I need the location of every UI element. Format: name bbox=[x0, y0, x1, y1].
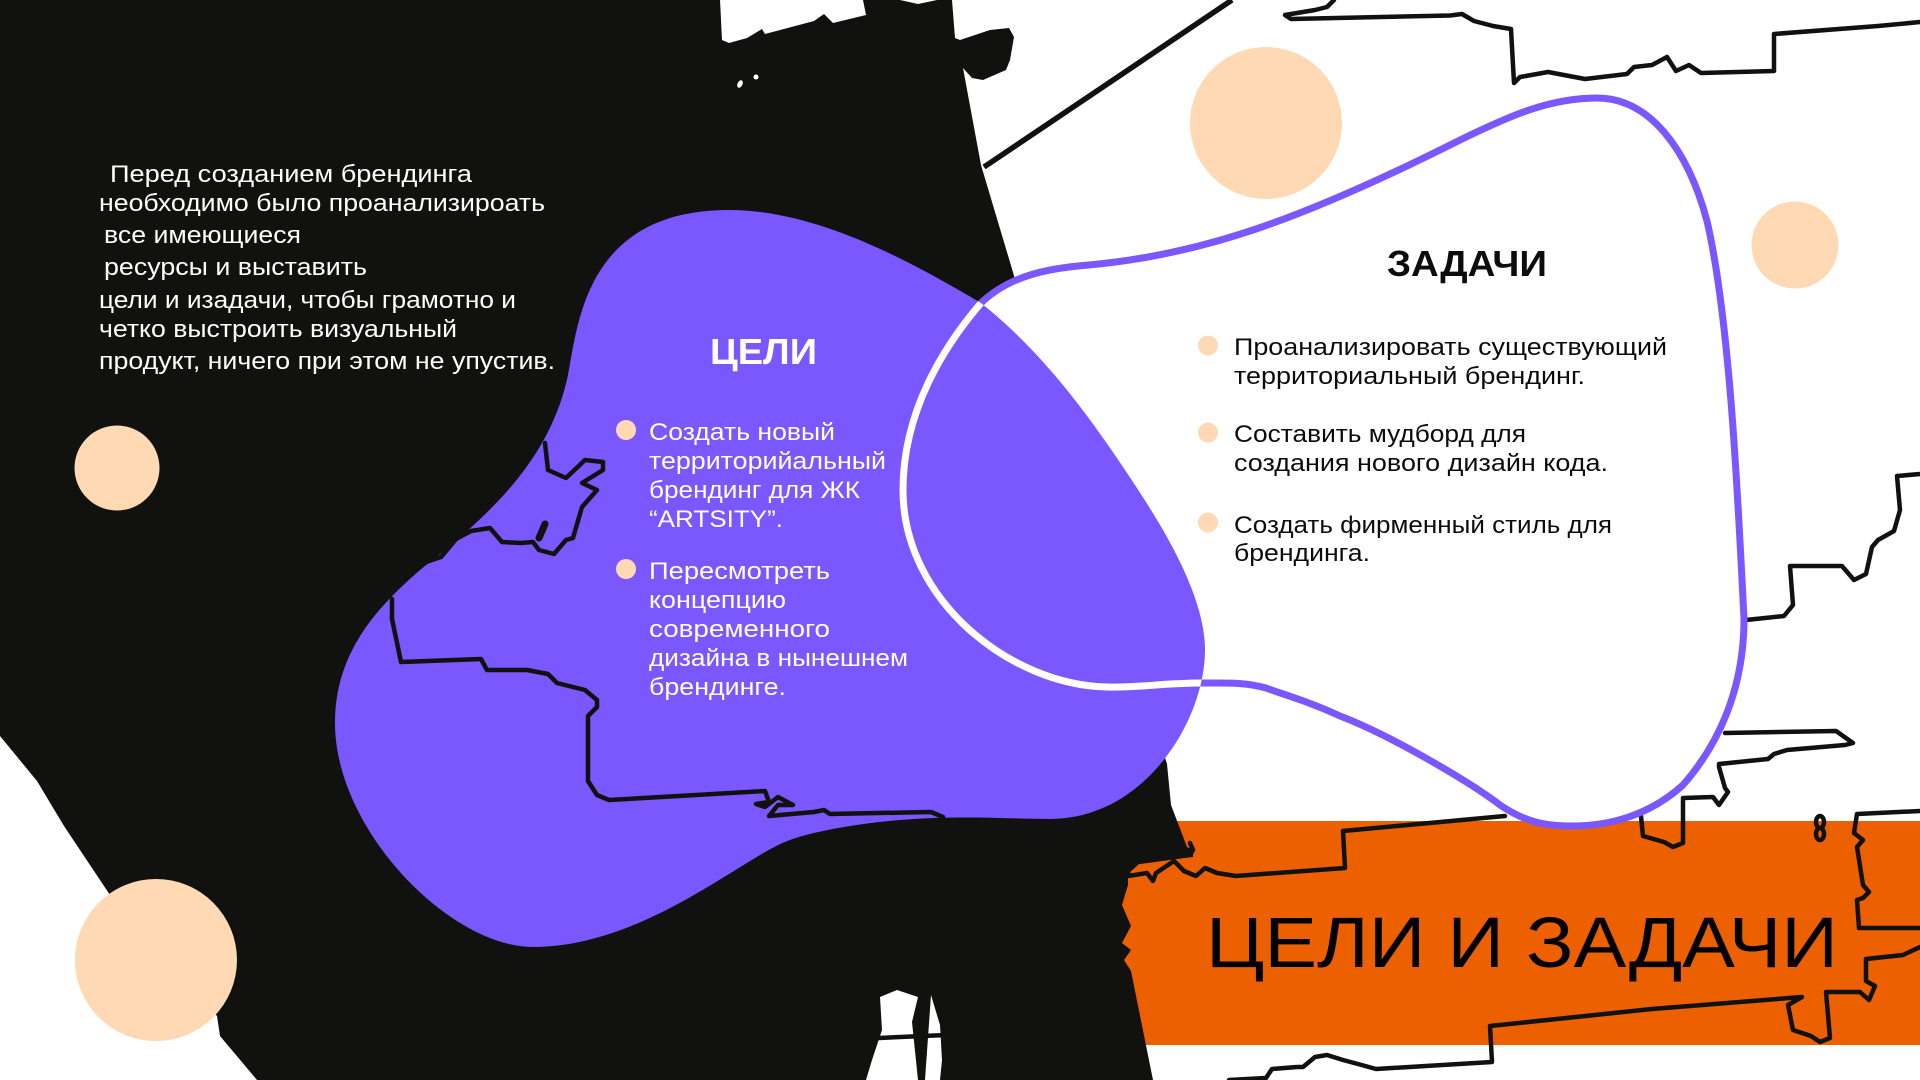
panel: tasks bbox=[1198, 243, 1667, 567]
filled blob: goals bbox=[335, 210, 1205, 947]
tasks bullet 3: брендинга. bbox=[1234, 540, 1370, 567]
goals bullet 2: современного bbox=[649, 616, 830, 643]
decorative circle right bbox=[1752, 202, 1838, 288]
intro text block: продукт, ничего при этом не упустив. bbox=[99, 348, 555, 375]
intro text block: необходимо было проанализироать bbox=[99, 190, 545, 217]
tasks bullet 3: Создать фирменный стиль для bbox=[1234, 512, 1612, 539]
intro text block bbox=[99, 161, 555, 375]
tasks bullet 2 bbox=[1198, 421, 1608, 477]
goals bullet 2: концепцию bbox=[649, 587, 786, 614]
tasks bullet 3 bbox=[1198, 512, 1612, 567]
goals bullet 1: брендинг для ЖК bbox=[649, 477, 860, 504]
map outline: right side bbox=[879, 0, 1920, 1080]
goals bullet 1: территорийальный bbox=[649, 448, 886, 475]
goals bullet 2: дизайна в нынешнем bbox=[649, 645, 908, 672]
white overlap outline bbox=[903, 265, 1202, 687]
goals bullet 1: Создать новый bbox=[649, 419, 835, 446]
decorative circle top bbox=[1190, 47, 1342, 199]
goals bullet 1: “ARTSITY”. bbox=[649, 506, 783, 533]
outlined blob: tasks bbox=[903, 98, 1744, 826]
intro text block: четко выстроить визуальный bbox=[99, 316, 457, 343]
tasks bullet 1 bbox=[1198, 334, 1667, 390]
white brush specks bbox=[736, 74, 758, 89]
tasks bullet 2: Составить мудборд для bbox=[1234, 421, 1526, 448]
decorative circle bottom left bbox=[75, 879, 237, 1041]
tasks bullet 1: Проанализировать существующий bbox=[1234, 334, 1667, 361]
goals bullet 2: брендинге. bbox=[649, 674, 786, 701]
orange title band bbox=[1100, 821, 1920, 1045]
tasks bullet 1: территориальный брендинг. bbox=[1234, 363, 1585, 390]
goals heading: ЦЕЛИ bbox=[710, 331, 817, 372]
intro text block: цели и изадачи, чтобы грамотно и bbox=[99, 287, 516, 314]
main title: ЦЕЛИ И ЗАДАЧИ bbox=[1206, 904, 1838, 983]
black brush shape bbox=[0, 0, 1193, 1080]
intro text block: Перед созданием брендинга bbox=[110, 161, 473, 188]
diagonal black line bbox=[984, 0, 1232, 167]
panel: goals bbox=[616, 331, 908, 701]
goals bullet 2: Пересмотреть bbox=[649, 558, 830, 585]
map outline: over goals blob bbox=[392, 443, 943, 817]
goals bullet 1 bbox=[616, 419, 886, 533]
goals bullet 2 bbox=[616, 558, 908, 701]
decorative circle left bbox=[74, 426, 160, 510]
tasks bullet 2: создания нового дизайн кода. bbox=[1234, 450, 1608, 477]
tasks heading: ЗАДАЧИ bbox=[1387, 243, 1547, 284]
intro text block: все имеющиеся bbox=[104, 222, 301, 249]
intro text block: ресурсы и выставить bbox=[104, 254, 367, 281]
